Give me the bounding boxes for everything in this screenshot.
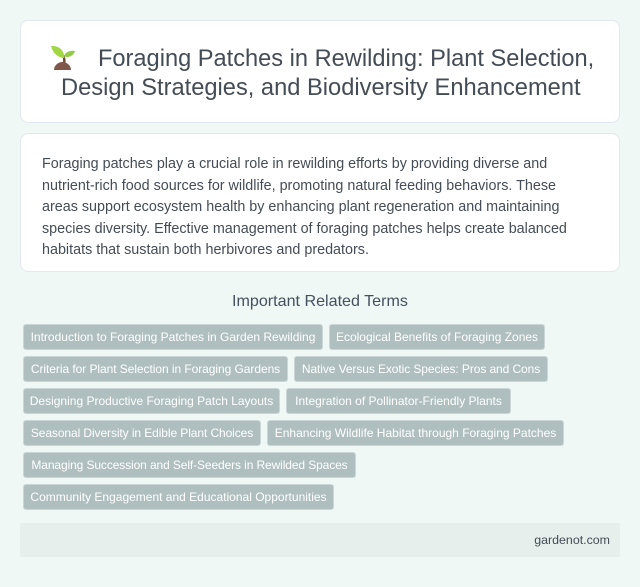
icon: seedling (51, 46, 75, 70)
tag (267, 420, 564, 446)
tag (23, 388, 280, 414)
tag: Native Versus Exotic Species: Pros and Cons (302, 362, 540, 376)
title: Design Strategies, and Biodiversity Enhancement (61, 74, 581, 101)
footer text: site name: gardenot.com (534, 533, 610, 547)
tag list (23, 324, 564, 510)
tag: Introduction to Foraging Patches in Garden Rewilding (31, 330, 315, 344)
description text: areas support ecosystem health by enhancing plant regeneration and maintaining (42, 199, 560, 215)
tag (286, 388, 511, 414)
tag: Seasonal Diversity in Edible Plant Choices (31, 426, 253, 440)
description text: nutrient-rich food sources for wildlife, promoting natural feeding behaviors. These (42, 178, 556, 194)
footer bar (20, 523, 620, 557)
title: Foraging Patches in Rewilding: Plant Selection, (98, 45, 594, 72)
description text (42, 156, 567, 258)
title (61, 45, 594, 101)
description text: species diversity. Effective management of foraging patches helps create balanced (42, 220, 567, 236)
tag: Ecological Benefits of Foraging Zones (336, 330, 538, 344)
description text: habitats that sustain both herbivores and predators. (42, 242, 369, 258)
tag (23, 324, 323, 350)
tag (23, 452, 356, 478)
tag: Managing Succession and Self-Seeders in Rewilded Spaces (31, 458, 348, 472)
tag (23, 356, 288, 382)
panel: description (20, 133, 620, 272)
tag (23, 484, 334, 510)
tag: Enhancing Wildlife Habitat through Foraging Patches (275, 426, 556, 440)
panel: title card (20, 20, 620, 123)
tag: Criteria for Plant Selection in Foraging Gardens (31, 362, 280, 376)
tag: Integration of Pollinator-Friendly Plants (295, 394, 502, 408)
heading: related terms: Important Related Terms (232, 292, 408, 310)
tag (329, 324, 545, 350)
tag (294, 356, 548, 382)
description text: Foraging patches play a crucial role in rewilding efforts by providing diverse and (42, 156, 547, 172)
tag: Designing Productive Foraging Patch Layouts (30, 394, 273, 408)
tag: Community Engagement and Educational Opportunities (30, 490, 327, 504)
tag (23, 420, 261, 446)
